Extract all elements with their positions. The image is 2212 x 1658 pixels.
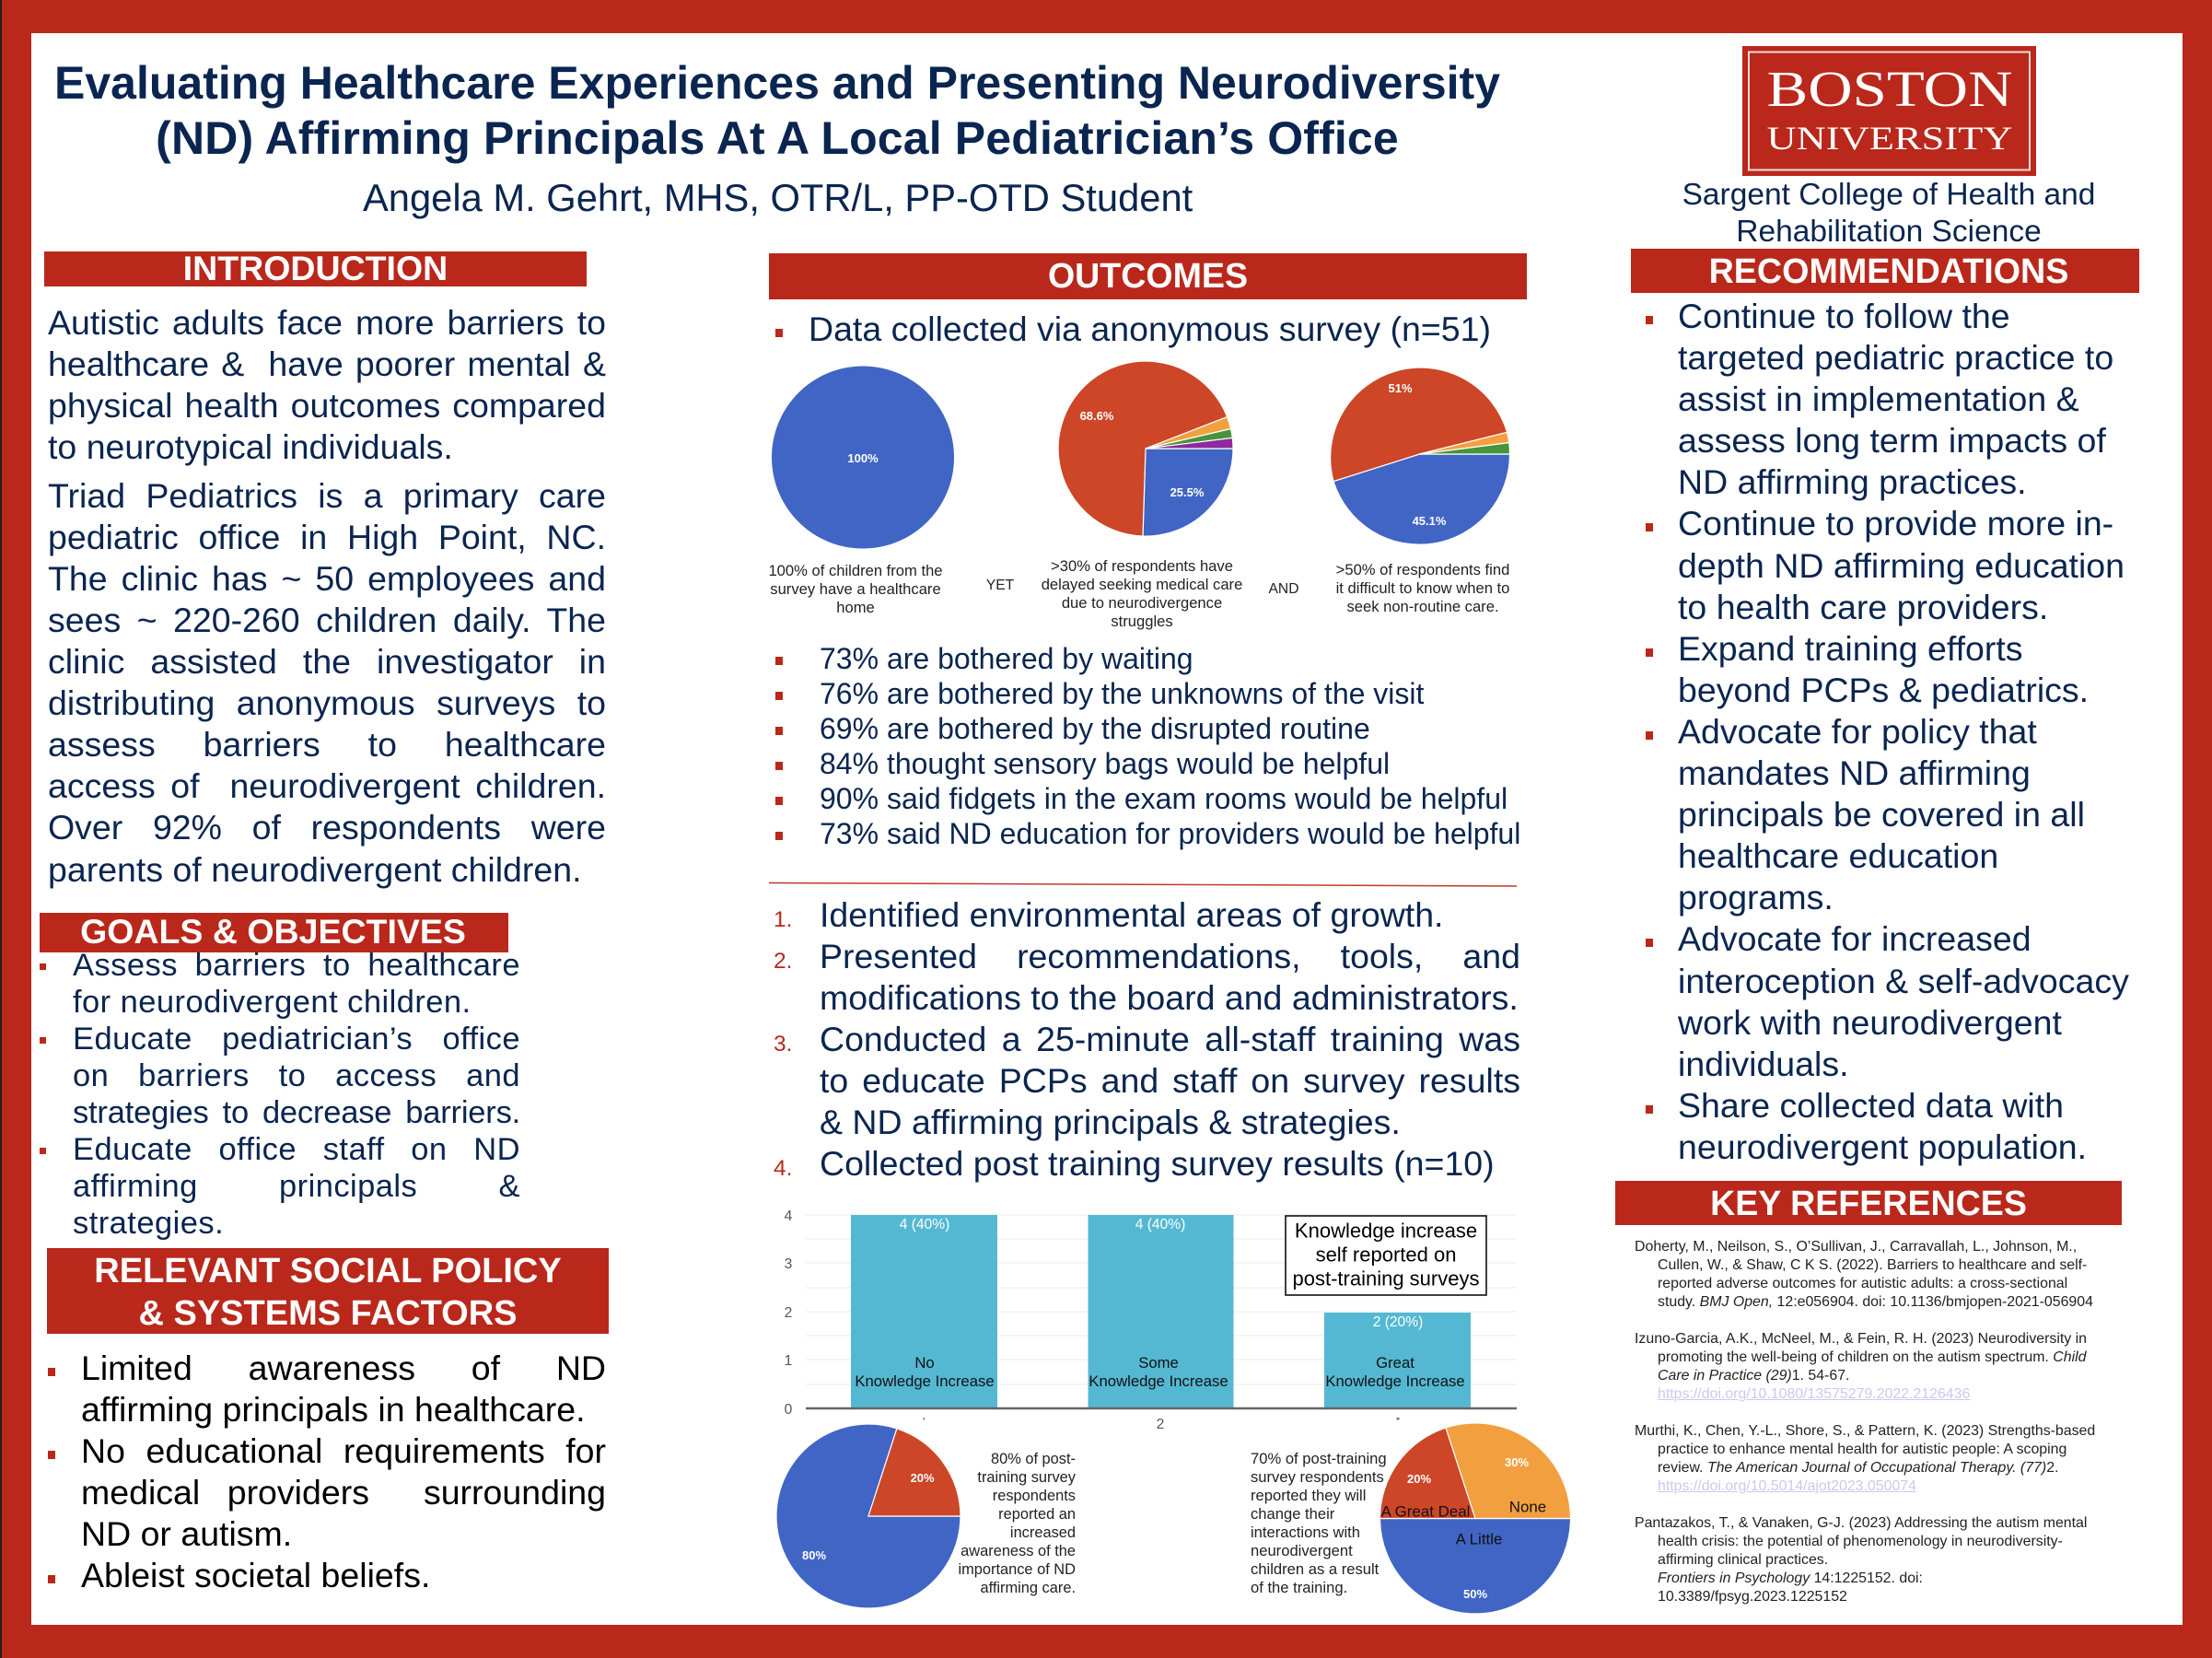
text block: references: practice to enhance mental health for autistic people: A scoping — [1658, 1442, 2066, 1457]
list: recommendations: Expand training efforts — [1678, 629, 2023, 668]
list: policy factors: medical providers surrounding — [81, 1473, 606, 1512]
text block: introduction paragraph 2: pediatric office in High Point, NC. — [48, 518, 606, 556]
text block: introduction paragraph 2: parents of neurodivergent children. — [48, 850, 582, 889]
pie chart: behaviour change: 50% — [1463, 1587, 1487, 1601]
pie chart: non-routine care: 45.1% — [1413, 514, 1447, 528]
pie chart: behaviour change: A Little — [1456, 1531, 1502, 1547]
list: recommendations: depth ND affirming education — [1678, 546, 2125, 585]
list: recommendations: interoception & self-advocacy — [1678, 962, 2129, 1000]
caption: behaviour change: children as a result — [1251, 1560, 1380, 1578]
bar chart: knowledge increase: 1 — [785, 1353, 792, 1369]
title: Evaluating Healthcare Experiences and Presenting Neurodiversity — [54, 57, 1500, 109]
statistics list: 90% said fidgets in the exam rooms would be helpful — [820, 782, 1508, 815]
logo: Boston University — [1742, 46, 2036, 176]
caption: delayed care: >30% of respondents have — [1051, 557, 1233, 575]
numbered list: actions: modifications to the board and administrators. — [820, 978, 1519, 1017]
caption: healthcare home: 100% of children from the — [768, 562, 943, 579]
text block: references: affirming clinical practices. — [1658, 1552, 1828, 1568]
text: 3. — [774, 1032, 792, 1057]
list: policy factors: ND or autism. — [81, 1514, 292, 1553]
caption: behaviour change: 70% of post-training — [1251, 1450, 1387, 1467]
college name — [1682, 178, 2095, 249]
text block: references: https://doi.org/10.5014/ajot2023.050074 — [1658, 1478, 1916, 1494]
list: recommendations: ND affirming practices. — [1678, 462, 2027, 501]
caption: behaviour change: interactions with — [1251, 1524, 1360, 1541]
text block: introduction paragraph 1: healthcare & have poorer mental & — [48, 344, 606, 383]
numbered list: actions: & ND affirming principals & strategies. — [820, 1103, 1401, 1141]
caption: behaviour change — [1251, 1450, 1387, 1596]
bar chart: knowledge increase: 3 — [785, 1256, 792, 1272]
text block: references: Murthi, K., Chen, Y.-L., Shore, S., & Pattern, K. (2023) Strengths-based — [1635, 1423, 2095, 1439]
bar chart: knowledge increase: 2 (20%) — [1373, 1314, 1423, 1330]
pie chart: awareness: 80% — [802, 1548, 826, 1562]
caption: awareness: increased — [1010, 1524, 1076, 1541]
list: recommendations: Advocate for policy that — [1678, 712, 2037, 751]
text block: references: Cullen, W., & Shaw, C K S. (2022). Barriers to healthcare and self- — [1658, 1257, 2087, 1273]
logo: Boston University: BOSTON — [1766, 61, 2013, 117]
callout: knowledge increase: post-training surveys — [1293, 1267, 1479, 1290]
text: 2. — [774, 949, 792, 974]
text block: references: health crisis: the potential of phenomenology in neurodiversity- — [1658, 1534, 2063, 1549]
text block: introduction paragraph 1: Autistic adults face more barriers to — [48, 302, 606, 341]
list: policy factors: Ableist societal beliefs. — [81, 1556, 430, 1594]
list: policy factors: affirming principals in healthcare. — [81, 1390, 586, 1429]
list: policy factors: No educational requirements for — [81, 1431, 606, 1470]
bar chart: knowledge increase: 4 (40%) — [1135, 1217, 1185, 1232]
caption: awareness — [958, 1451, 1077, 1596]
bar chart: knowledge increase: 2 — [785, 1305, 792, 1321]
text block: references: Frontiers in Psychology 14:1225152. doi: — [1658, 1570, 1923, 1586]
text block: introduction paragraph 1: to neurotypical individuals. — [48, 427, 453, 466]
bar chart: knowledge increase: 0 — [785, 1402, 793, 1418]
text: 1. — [774, 907, 792, 932]
college name: Rehabilitation Science — [1736, 215, 2042, 249]
list: goals: for neurodivergent children. — [73, 984, 472, 1019]
list: recommendations: beyond PCPs & pediatrics. — [1678, 671, 2089, 709]
caption: behaviour change: reported they will — [1251, 1487, 1366, 1504]
text block: introduction paragraph 2: Over 92% of respondents were — [48, 808, 606, 847]
pie chart: healthcare home 100% — [772, 367, 954, 549]
text block: references: 10.3389/fpsyg.2023.1225152 — [1658, 1589, 1847, 1605]
bar chart: knowledge increase: Great — [1376, 1354, 1415, 1372]
heading: goals and objectives: GOALS & OBJECTIVES — [80, 912, 466, 951]
callout: knowledge increase: Knowledge increase — [1295, 1220, 1477, 1242]
heading: recommendations: RECOMMENDATIONS — [1709, 251, 2068, 290]
statistics list: 76% are bothered by the unknowns of the visit — [820, 677, 1424, 710]
list: goals — [40, 947, 520, 1240]
numbered list: actions: Identified environmental areas of growth. — [820, 895, 1443, 934]
text block: introduction paragraph 1 — [48, 302, 606, 466]
logo: Boston University: UNIVERSITY — [1766, 120, 2013, 157]
bar chart: knowledge increase: 4 — [785, 1208, 793, 1224]
caption: delayed care — [1042, 557, 1242, 630]
list: recommendations: assist in implementation & — [1678, 379, 2079, 418]
pie chart: delayed care: 25.5% — [1170, 485, 1205, 499]
numbered list: actions: to educate PCPs and staff on survey results — [820, 1061, 1520, 1100]
caption: delayed care: delayed seeking medical care — [1042, 576, 1242, 593]
college name: Sargent College of Health and — [1682, 178, 2095, 212]
caption: awareness: affirming care. — [980, 1580, 1076, 1596]
heading: key references — [1615, 1181, 2122, 1225]
caption: awareness: awareness of the — [960, 1543, 1076, 1559]
heading: outcomes: OUTCOMES — [1048, 256, 1248, 295]
text block: references: Doherty, M., Neilson, S., O’Sullivan, J., Carravallah, L., Johnson, M., — [1635, 1239, 2077, 1255]
heading: recommendations — [1631, 249, 2139, 293]
list: goals: Educate office staff on ND — [73, 1131, 520, 1166]
numbered list: actions: Presented recommendations, tools, and — [820, 937, 1520, 975]
bar chart: knowledge increase: No — [914, 1354, 935, 1372]
text block: introduction paragraph 2: access of neurodivergent children. — [48, 766, 606, 805]
heading: introduction: INTRODUCTION — [183, 249, 448, 287]
text block: introduction paragraph 2 — [48, 476, 606, 889]
heading: relevant social policy: RELEVANT SOCIAL POLICY — [94, 1251, 562, 1290]
caption: behaviour change: survey respondents — [1251, 1468, 1384, 1486]
list: recommendations: individuals. — [1678, 1045, 1849, 1083]
pie chart: non-routine care — [1331, 368, 1510, 544]
bar chart: knowledge increase — [785, 1208, 1517, 1432]
statistics list: 73% are bothered by waiting — [820, 642, 1193, 675]
caption: healthcare home — [768, 562, 943, 616]
list: recommendations: Share collected data with — [1678, 1086, 2064, 1125]
caption: awareness: training survey — [977, 1469, 1077, 1486]
list: goals: on barriers to access and — [73, 1057, 520, 1092]
survey note: Data collected via anonymous survey (n=51) — [809, 309, 1491, 348]
pie chart: delayed care — [1058, 361, 1233, 536]
list: recommendations: principals be covered in all — [1678, 795, 2085, 834]
numbered list: actions: Collected post training survey results (n=10) — [820, 1144, 1495, 1183]
text block: references: review. The American Journal of Occupational Therapy. (77)2. — [1658, 1460, 2058, 1476]
callout: knowledge increase — [1286, 1216, 1486, 1295]
bar chart: knowledge increase: Knowledge Increase — [1325, 1372, 1465, 1390]
statistics list: 69% are bothered by the disrupted routine — [820, 712, 1370, 745]
list: recommendations: Continue to follow the — [1678, 297, 2010, 335]
list: goals: affirming principals & — [73, 1168, 520, 1203]
text block: references: Care in Practice (29)1. 54-67. — [1658, 1368, 1849, 1384]
caption: behaviour change: change their — [1251, 1505, 1335, 1523]
text block: introduction paragraph 2: assess barriers to healthcare — [48, 725, 606, 764]
list: goals: Assess barriers to healthcare — [73, 947, 520, 982]
connector word: and: AND — [1269, 581, 1298, 597]
text block: references: Pantazakos, T., & Vanaken, G-J. (2023) Addressing the autism mental — [1635, 1515, 2087, 1531]
text block: introduction paragraph 1: physical health outcomes compared — [48, 386, 606, 425]
text block: references: https://doi.org/10.1080/13575279.2022.2126436 — [1658, 1386, 1970, 1402]
heading: outcomes — [769, 253, 1527, 299]
heading: relevant social policy — [47, 1248, 609, 1334]
text block: references: promoting the well-being of children on the autism spectrum. Child — [1658, 1349, 2086, 1365]
caption: behaviour change: of the training. — [1251, 1579, 1347, 1596]
list: recommendations — [1646, 297, 2129, 1166]
text block: references: study. BMJ Open, 12:e056904. doi: 10.1136/bmjopen-2021-056904 — [1658, 1294, 2093, 1310]
pie chart: non-routine care: 51% — [1388, 381, 1413, 395]
bar chart: knowledge increase: Knowledge Increase — [1089, 1372, 1228, 1390]
list: recommendations: work with neurodivergent — [1678, 1003, 2062, 1042]
text block: introduction paragraph 2: clinic assisted the investigator in — [48, 642, 606, 681]
numbered list: actions: Conducted a 25-minute all-staff training was — [820, 1020, 1520, 1058]
text block: introduction paragraph 2: distributing anonymous surveys to — [48, 683, 606, 722]
pie chart: behaviour change: A Great Deal — [1381, 1503, 1470, 1520]
caption: delayed care: due to neurodivergence — [1062, 594, 1222, 612]
bar chart: knowledge increase: 2 — [1157, 1417, 1164, 1432]
pie chart: healthcare home 100%: 100% — [847, 451, 879, 465]
caption: non-routine care — [1336, 561, 1509, 615]
title — [54, 57, 1500, 164]
callout: knowledge increase: self reported on — [1316, 1244, 1456, 1266]
pie chart: behaviour change: 30% — [1505, 1455, 1529, 1469]
pie chart: behaviour change: None — [1509, 1498, 1546, 1516]
caption: awareness: 80% of post- — [991, 1451, 1076, 1467]
list: recommendations: to health care providers. — [1678, 588, 2048, 626]
heading: key references: KEY REFERENCES — [1710, 1184, 2027, 1222]
list: recommendations: mandates ND affirming — [1678, 753, 2031, 792]
numbered list: actions — [774, 895, 1520, 1183]
text block: references — [1635, 1239, 2095, 1605]
text block: introduction paragraph 2: sees ~ 220-260 children daily. The — [48, 601, 606, 639]
connector word: yet: YET — [986, 578, 1015, 593]
list: recommendations: programs. — [1678, 878, 1834, 917]
caption: healthcare home: survey have a healthcare — [770, 580, 941, 598]
heading: relevant social policy: & SYSTEMS FACTORS — [138, 1293, 518, 1332]
text: 4. — [774, 1156, 792, 1181]
pie chart: delayed care: 68.6% — [1080, 409, 1114, 423]
bar chart: knowledge increase: 4 (40%) — [900, 1217, 949, 1232]
caption: non-routine care: it difficult to know when to — [1336, 579, 1509, 597]
bar chart: knowledge increase: Knowledge Increase — [855, 1372, 995, 1390]
text block: references: Izuno-Garcia, A.K., McNeel, M., & Fein, R. H. (2023) Neurodiversity in — [1635, 1331, 2087, 1347]
caption: awareness: reported an — [998, 1506, 1076, 1523]
list: goals: Educate pediatrician’s office — [73, 1021, 520, 1056]
caption: non-routine care: >50% of respondents find — [1336, 561, 1509, 578]
text block: introduction paragraph 2: Triad Pediatrics is a primary care — [48, 476, 606, 515]
pie chart: behaviour change: 20% — [1407, 1472, 1431, 1486]
list: goals: strategies. — [73, 1205, 224, 1240]
list: recommendations: healthcare education — [1678, 836, 1998, 875]
list: goals: strategies to decrease barriers. — [73, 1094, 520, 1129]
heading: introduction — [44, 251, 587, 286]
list: policy factors: Limited awareness of ND — [81, 1349, 606, 1387]
caption: awareness: respondents — [993, 1488, 1076, 1504]
caption: awareness: importance of ND — [958, 1561, 1076, 1578]
pie chart: behaviour change — [1380, 1423, 1571, 1614]
author: Angela M. Gehrt, MHS, OTR/L, PP-OTD Student — [363, 176, 1193, 219]
list: recommendations: assess long term impacts of — [1678, 421, 2106, 460]
caption: non-routine care: seek non-routine care. — [1346, 598, 1499, 615]
caption: healthcare home: home — [836, 599, 875, 616]
bar chart: knowledge increase: Some — [1138, 1354, 1179, 1372]
pie chart: awareness — [776, 1424, 960, 1608]
list: recommendations: neurodivergent population. — [1678, 1127, 2087, 1166]
text block: references: reported adverse outcomes for autistic adults: a cross-sectional — [1658, 1276, 2067, 1291]
statistics list — [775, 642, 1520, 850]
statistics list: 73% said ND education for providers would be helpful — [820, 817, 1520, 850]
caption: behaviour change: neurodivergent — [1251, 1542, 1353, 1559]
title: (ND) Affirming Principals At A Local Pediatrician’s Office — [156, 112, 1399, 164]
list: recommendations: Continue to provide more in- — [1678, 504, 2113, 543]
caption: delayed care: struggles — [1111, 613, 1173, 630]
list: recommendations: Advocate for increased — [1678, 919, 2032, 958]
list: recommendations: targeted pediatric practice to — [1678, 338, 2113, 377]
statistics list: 84% thought sensory bags would be helpful — [820, 747, 1390, 780]
text block: introduction paragraph 2: The clinic has ~ 50 employees and — [48, 559, 606, 598]
list: policy factors — [48, 1349, 606, 1594]
pie chart: awareness: 20% — [911, 1471, 935, 1485]
